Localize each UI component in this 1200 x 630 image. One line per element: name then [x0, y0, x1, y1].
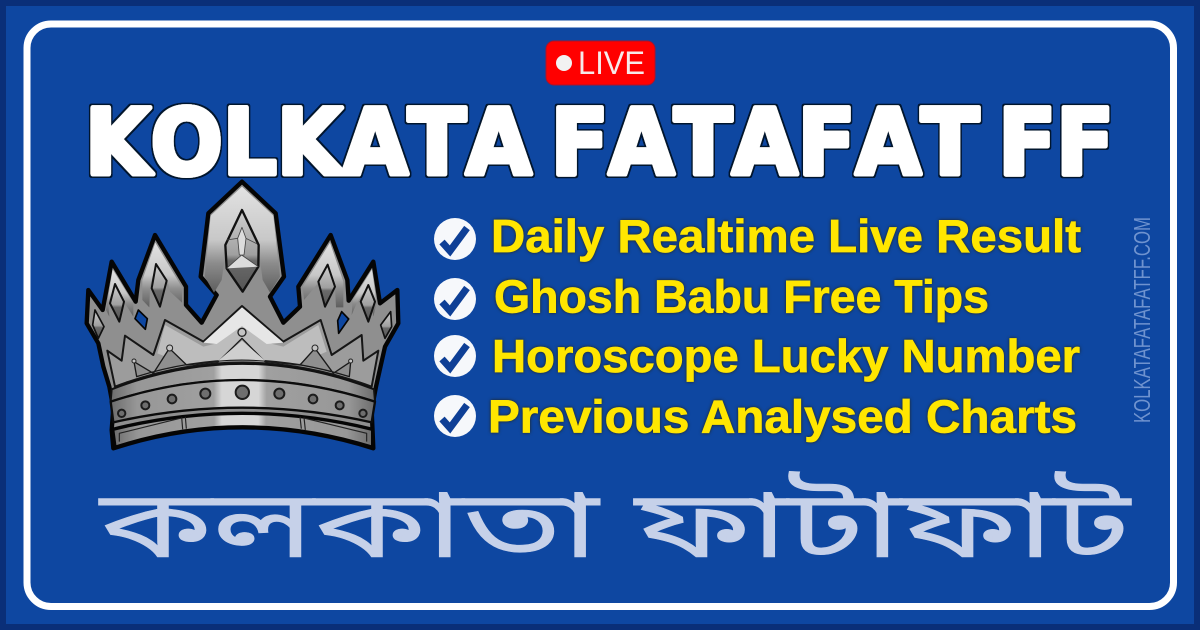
feature: charts: Previous Analysed Charts: [488, 390, 1077, 442]
feature: daily result: Daily Realtime Live Result: [491, 210, 1081, 262]
feature list: [434, 210, 1081, 442]
bengali heading: কলকাতা ফাটাফাট: [99, 471, 1132, 596]
live badge: LIVE: [578, 45, 645, 81]
feature: free tips: Ghosh Babu Free Tips: [494, 270, 989, 322]
website label: KOLKATAFATAFATFF.COM: [1129, 217, 1155, 423]
band lower panel: [113, 413, 373, 447]
live badge: [546, 41, 655, 85]
icon: silver crown: [87, 182, 398, 448]
blue gaps between points: [135, 310, 349, 333]
title: KOLKATA FATAFAT FF: [85, 91, 1114, 196]
inner crown arches: [107, 306, 378, 387]
band jewel row: [111, 380, 375, 422]
feature: lucky number: Horoscope Lucky Number: [492, 330, 1080, 382]
band top rim: [111, 364, 375, 402]
crown silhouette: [87, 182, 398, 448]
gems: [225, 210, 259, 292]
top spike facets: [205, 187, 280, 293]
